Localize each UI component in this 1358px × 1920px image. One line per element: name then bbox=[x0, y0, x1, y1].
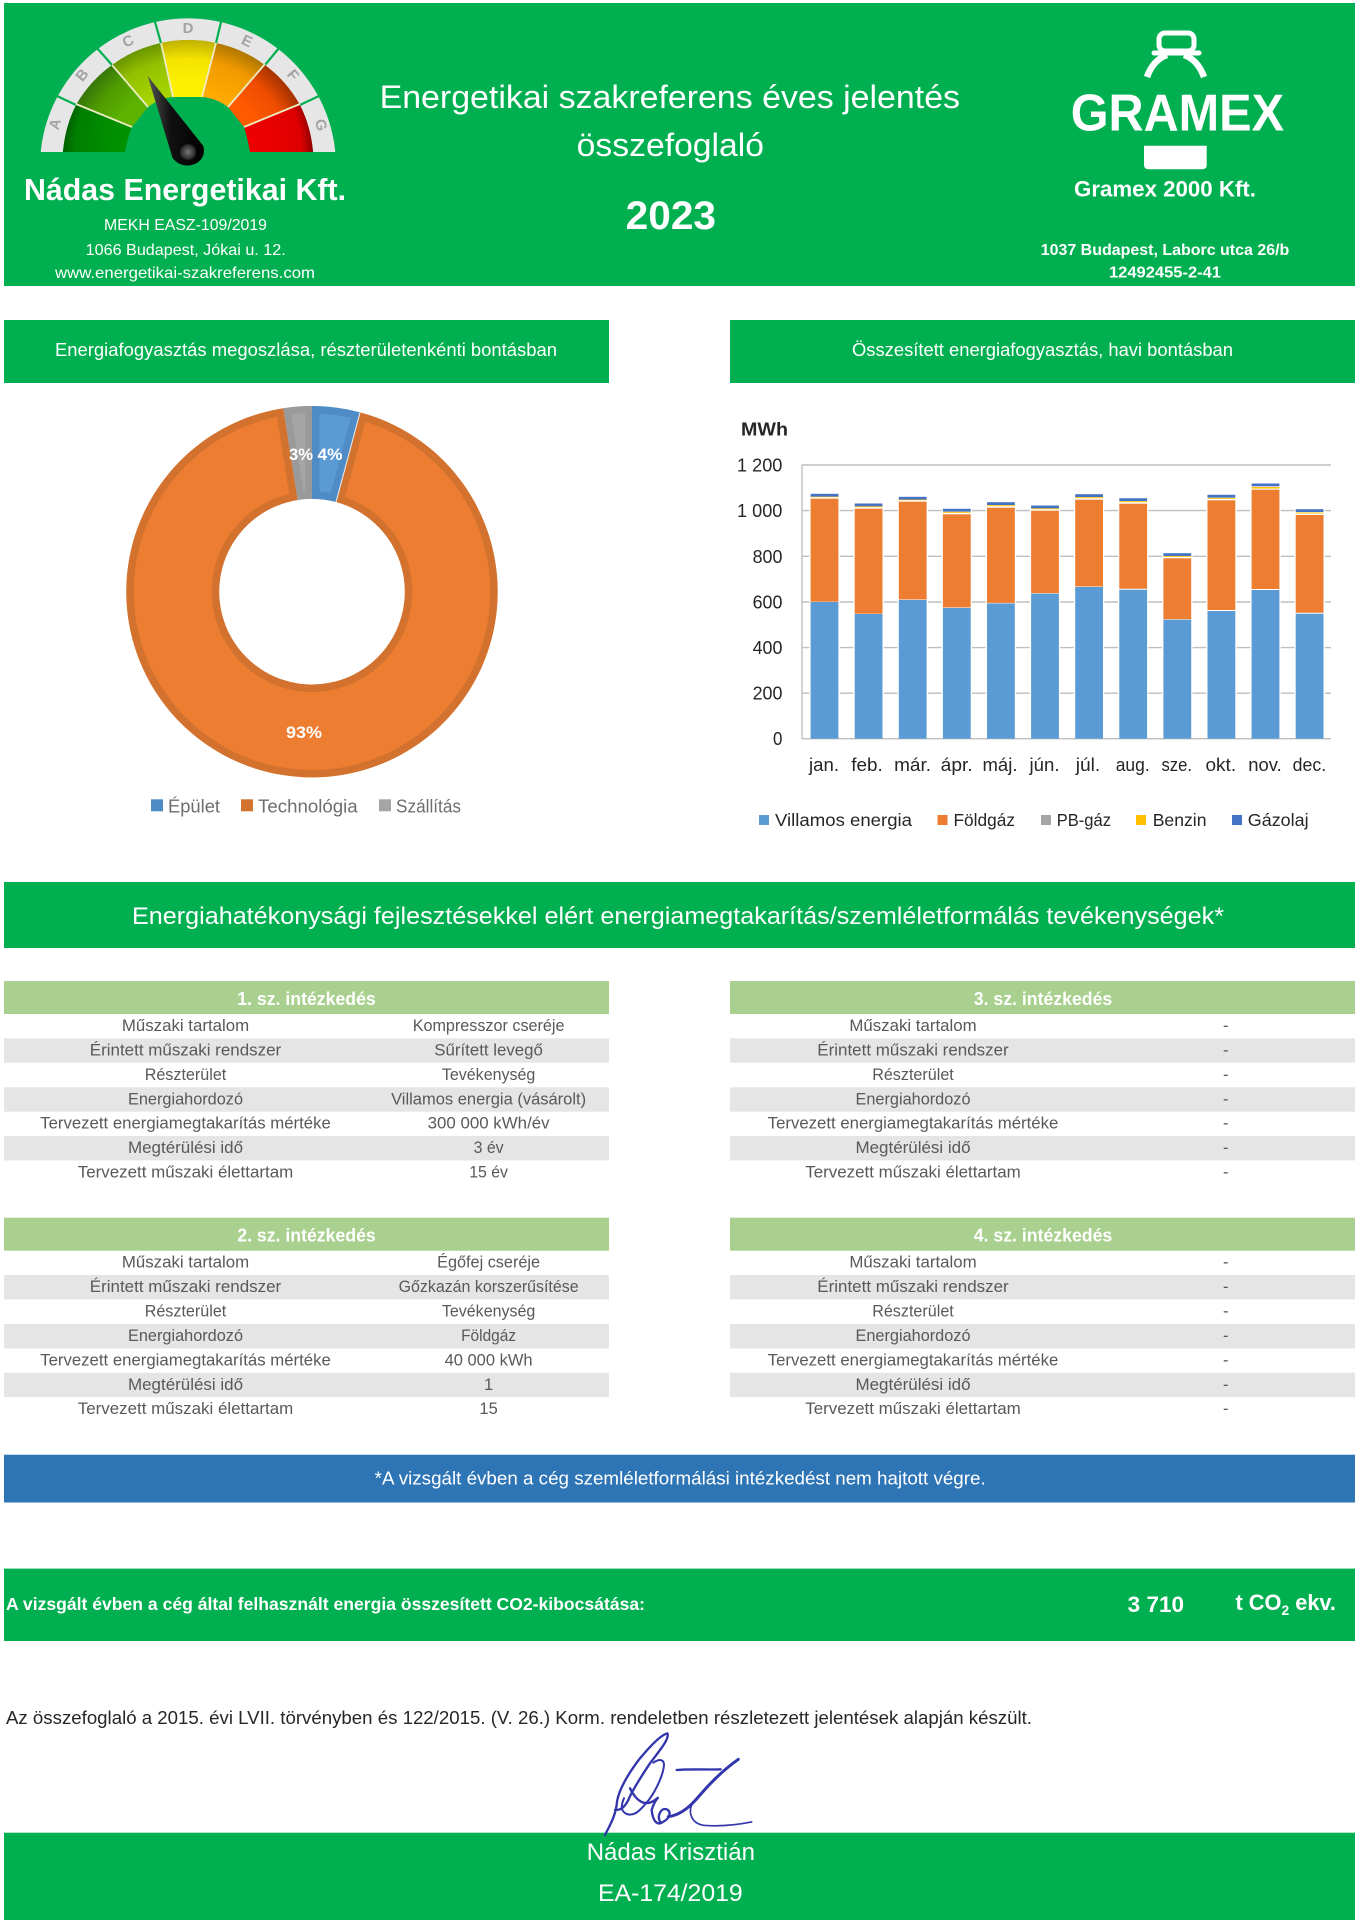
client company name: Gramex 2000 Kft. bbox=[1074, 177, 1256, 202]
row values: - bbox=[1223, 1115, 1228, 1133]
row labels bbox=[768, 1017, 1058, 1182]
row labels: Részterület bbox=[872, 1303, 954, 1321]
stacked bar chart bbox=[737, 419, 1331, 830]
main title bbox=[380, 79, 960, 163]
table header bbox=[4, 981, 609, 1014]
CO2 emissions band bbox=[4, 1569, 1355, 1641]
slice: Épület 4% bbox=[312, 406, 360, 502]
table: measure 2 bbox=[4, 1218, 609, 1418]
CO2 unit: 2 bbox=[1281, 1602, 1289, 1618]
row labels bbox=[768, 1254, 1058, 1418]
table: measure 1 bbox=[4, 981, 609, 1182]
data label: 3%: 3% bbox=[289, 445, 313, 464]
row labels: Tervezett energiamegtakarítás mértéke bbox=[768, 1115, 1058, 1133]
x axis labels: jan. bbox=[808, 755, 839, 775]
signer name: Nádas Krisztián bbox=[587, 1839, 755, 1866]
main title: Energetikai szakreferens éves jelentés bbox=[380, 79, 960, 115]
row values: Tevékenység bbox=[442, 1066, 535, 1084]
bar: dec. bbox=[1294, 508, 1325, 739]
left company details: MEKH EASZ-109/2019 bbox=[104, 217, 267, 234]
signature bbox=[605, 1733, 752, 1835]
bar chart legend: Gázolaj bbox=[1248, 810, 1309, 830]
row labels: Részterület bbox=[145, 1303, 227, 1321]
row values: Kompresszor cseréje bbox=[413, 1017, 564, 1035]
y axis labels: 1 200 bbox=[737, 454, 782, 476]
bar: júl. bbox=[1074, 493, 1104, 739]
y axis labels: 200 bbox=[753, 683, 782, 704]
row labels: Energiahordozó bbox=[128, 1090, 243, 1108]
bar: jún. bbox=[1030, 504, 1060, 739]
table header: 2. sz. intézkedés bbox=[237, 1226, 376, 1246]
y axis labels: 400 bbox=[753, 637, 782, 658]
row values: - bbox=[1223, 1254, 1228, 1272]
client company details: 1037 Budapest, Laborc utca 26/b bbox=[1041, 242, 1290, 259]
client company details bbox=[1041, 242, 1290, 282]
row values: - bbox=[1223, 1303, 1228, 1321]
row values: 15 bbox=[479, 1400, 498, 1418]
row labels: Energiahordozó bbox=[856, 1327, 970, 1345]
bar: jan. bbox=[809, 493, 840, 739]
row values: - bbox=[1223, 1400, 1228, 1418]
signer registration number: EA-174/2019 bbox=[598, 1880, 743, 1907]
bar: aug. bbox=[1118, 497, 1148, 739]
bar chart legend bbox=[759, 810, 1309, 830]
bar: sze. bbox=[1162, 552, 1192, 739]
table header bbox=[730, 1218, 1355, 1251]
bar chart legend: Villamos energia bbox=[775, 810, 912, 830]
row values: Földgáz bbox=[461, 1327, 516, 1345]
row labels: Érintett műszaki rendszer bbox=[90, 1040, 282, 1060]
legal note: Az összefoglaló a 2015. évi LVII. törvényben és 122/2015. (V. 26.) Korm. rendeletben részletezett jelentések alapján készült. bbox=[6, 1708, 1032, 1728]
x axis labels: nov. bbox=[1248, 755, 1282, 775]
x axis labels: dec. bbox=[1293, 755, 1326, 775]
row values bbox=[1223, 1254, 1228, 1418]
section heading: consumption split bbox=[4, 320, 609, 383]
x axis labels: máj. bbox=[982, 755, 1018, 775]
row values: - bbox=[1223, 1278, 1228, 1296]
row values: - bbox=[1223, 1164, 1228, 1182]
x axis labels: okt. bbox=[1206, 755, 1236, 775]
main title: összefoglaló bbox=[577, 127, 764, 163]
row labels: Műszaki tartalom bbox=[849, 1254, 977, 1272]
row values: Égőfej cseréje bbox=[437, 1253, 540, 1272]
row labels: Energiahordozó bbox=[856, 1090, 970, 1108]
y axis labels: 1 000 bbox=[737, 500, 782, 521]
row values: 300 000 kWh/év bbox=[428, 1115, 550, 1133]
bar: máj. bbox=[986, 501, 1016, 739]
row labels bbox=[40, 1017, 331, 1182]
row labels: Részterület bbox=[145, 1066, 227, 1084]
bar chart legend: Benzin bbox=[1153, 810, 1206, 830]
row values bbox=[1223, 1017, 1228, 1182]
row labels: Tervezett energiamegtakarítás mértéke bbox=[40, 1351, 331, 1369]
y axis labels bbox=[737, 454, 782, 749]
data label: 93%: 93% bbox=[286, 723, 322, 742]
row labels: Műszaki tartalom bbox=[122, 1017, 249, 1035]
x axis labels: júl. bbox=[1075, 755, 1100, 775]
icon: energy rating gauge: A bbox=[46, 116, 65, 132]
bar chart legend: PB-gáz bbox=[1057, 810, 1111, 830]
row labels: Érintett műszaki rendszer bbox=[90, 1277, 282, 1296]
client company details: 12492455-2-41 bbox=[1109, 265, 1221, 282]
CO2 label: A vizsgált évben a cég által felhasznált energia összesített CO2-kibocsátása: bbox=[6, 1594, 645, 1614]
row labels: Érintett műszaki rendszer bbox=[817, 1277, 1009, 1296]
y axis labels: 0 bbox=[773, 728, 782, 749]
bar chart legend: Földgáz bbox=[954, 810, 1015, 830]
section heading: monthly consumption: Összesített energiafogyasztás, havi bontásban bbox=[852, 340, 1233, 360]
y axis labels: 600 bbox=[753, 592, 782, 612]
row labels: Tervezett műszaki élettartam bbox=[78, 1164, 293, 1182]
row values: 1 bbox=[484, 1376, 493, 1394]
bar: okt. bbox=[1206, 494, 1237, 739]
row values: - bbox=[1223, 1139, 1228, 1157]
slice: Szállítás 3% bbox=[283, 406, 312, 500]
data label: 4%: 4% bbox=[318, 445, 342, 464]
row values: - bbox=[1223, 1351, 1228, 1369]
donut legend: Technológia bbox=[258, 796, 358, 817]
table: measure 4 bbox=[730, 1218, 1355, 1418]
row values: 3 év bbox=[474, 1139, 504, 1157]
row values: Tevékenység bbox=[442, 1303, 535, 1321]
row values: - bbox=[1223, 1090, 1228, 1108]
table header bbox=[4, 1218, 609, 1251]
row labels: Műszaki tartalom bbox=[849, 1017, 977, 1035]
icon: energy rating gauge: E bbox=[239, 32, 255, 51]
bar: már. bbox=[898, 496, 928, 739]
section heading: consumption split: Energiafogyasztás megoszlása, részterületenkénti bontásban bbox=[55, 340, 557, 360]
table: measure 3 bbox=[730, 981, 1355, 1182]
x axis labels: feb. bbox=[851, 755, 883, 775]
icon: energy rating gauge: C bbox=[120, 31, 137, 51]
icon: energy rating gauge bbox=[41, 18, 335, 166]
row labels: Érintett műszaki rendszer bbox=[817, 1040, 1009, 1060]
row labels: Energiahordozó bbox=[128, 1327, 243, 1345]
signature footer band bbox=[4, 1833, 1355, 1920]
row labels: Megtérülési idő bbox=[128, 1376, 243, 1394]
icon: energy rating gauge: F bbox=[283, 66, 302, 84]
row labels: Tervezett műszaki élettartam bbox=[78, 1400, 293, 1418]
bar: nov. bbox=[1250, 482, 1281, 739]
section heading: savings activities bbox=[4, 882, 1355, 948]
icon: energy rating gauge: D bbox=[183, 20, 194, 37]
row values: - bbox=[1223, 1376, 1228, 1394]
year: 2023 bbox=[626, 194, 716, 238]
donut chart bbox=[126, 406, 498, 777]
bar: feb. bbox=[853, 502, 884, 739]
row values bbox=[391, 1017, 586, 1182]
table header: 3. sz. intézkedés bbox=[974, 989, 1112, 1009]
row values: - bbox=[1223, 1042, 1228, 1060]
left company details bbox=[54, 217, 315, 282]
row values: Villamos energia (vásárolt) bbox=[391, 1090, 586, 1108]
slice: Technológia 93% bbox=[126, 408, 498, 777]
callout: no awareness measures: *A vizsgált évben a cég szemléletformálási intézkedést nem hajtott végre. bbox=[375, 1468, 986, 1488]
row labels: Megtérülési idő bbox=[856, 1139, 970, 1157]
bar: ápr. bbox=[942, 508, 972, 739]
x axis labels: már. bbox=[894, 755, 931, 775]
y axis labels: 800 bbox=[753, 546, 782, 567]
logo: Gramex: GRAMEX bbox=[1071, 85, 1284, 143]
left company name: Nádas Energetikai Kft. bbox=[24, 172, 346, 207]
table header bbox=[730, 981, 1355, 1014]
donut legend bbox=[151, 796, 461, 817]
CO2 unit: ekv. bbox=[1289, 1590, 1336, 1615]
row values: 40 000 kWh bbox=[445, 1351, 533, 1369]
donut legend: Szállítás bbox=[396, 796, 461, 817]
left company details: 1066 Budapest, Jókai u. 12. bbox=[86, 242, 286, 259]
CO2 value: 3 710 bbox=[1128, 1592, 1184, 1617]
x axis labels: ápr. bbox=[941, 755, 973, 775]
donut legend: Épület bbox=[168, 796, 220, 817]
x axis labels bbox=[808, 755, 1326, 775]
section heading: monthly consumption bbox=[730, 320, 1355, 383]
x axis labels: sze. bbox=[1161, 755, 1192, 775]
row labels: Műszaki tartalom bbox=[122, 1254, 249, 1272]
icon: energy rating gauge: G bbox=[311, 117, 330, 133]
x axis labels: aug. bbox=[1116, 755, 1150, 775]
row labels bbox=[40, 1254, 331, 1418]
row values: - bbox=[1223, 1327, 1228, 1345]
logo: Gramex bbox=[1071, 33, 1284, 169]
row values: 15 év bbox=[469, 1164, 509, 1182]
row values bbox=[399, 1253, 579, 1418]
row labels: Részterület bbox=[872, 1066, 954, 1084]
icon: energy rating gauge: B bbox=[72, 66, 92, 85]
CO2 unit: t CO bbox=[1236, 1590, 1282, 1615]
row values: Sűrített levegő bbox=[434, 1042, 543, 1060]
header banner bbox=[4, 3, 1355, 286]
section heading: savings activities: Energiahatékonysági fejlesztésekkel elért energiamegtakarítás/szemléletformálás tevékenységek* bbox=[132, 903, 1224, 930]
row labels: Tervezett energiamegtakarítás mértéke bbox=[40, 1115, 331, 1133]
row labels: Megtérülési idő bbox=[128, 1139, 243, 1157]
left company details: www.energetikai-szakreferens.com bbox=[54, 265, 315, 282]
row labels: Tervezett energiamegtakarítás mértéke bbox=[768, 1351, 1058, 1369]
row labels: Megtérülési idő bbox=[856, 1376, 970, 1394]
row labels: Tervezett műszaki élettartam bbox=[805, 1164, 1021, 1182]
table header: 4. sz. intézkedés bbox=[974, 1226, 1112, 1246]
callout: no awareness measures bbox=[4, 1455, 1355, 1502]
row values: - bbox=[1223, 1017, 1228, 1035]
x axis labels: jún. bbox=[1028, 755, 1060, 775]
gauge needle bbox=[148, 76, 204, 166]
row values: - bbox=[1223, 1066, 1228, 1084]
table header: 1. sz. intézkedés bbox=[237, 989, 376, 1009]
row values: Gőzkazán korszerűsítése bbox=[399, 1278, 579, 1296]
y axis unit: MWh bbox=[741, 419, 788, 440]
row labels: Tervezett műszaki élettartam bbox=[805, 1400, 1021, 1418]
